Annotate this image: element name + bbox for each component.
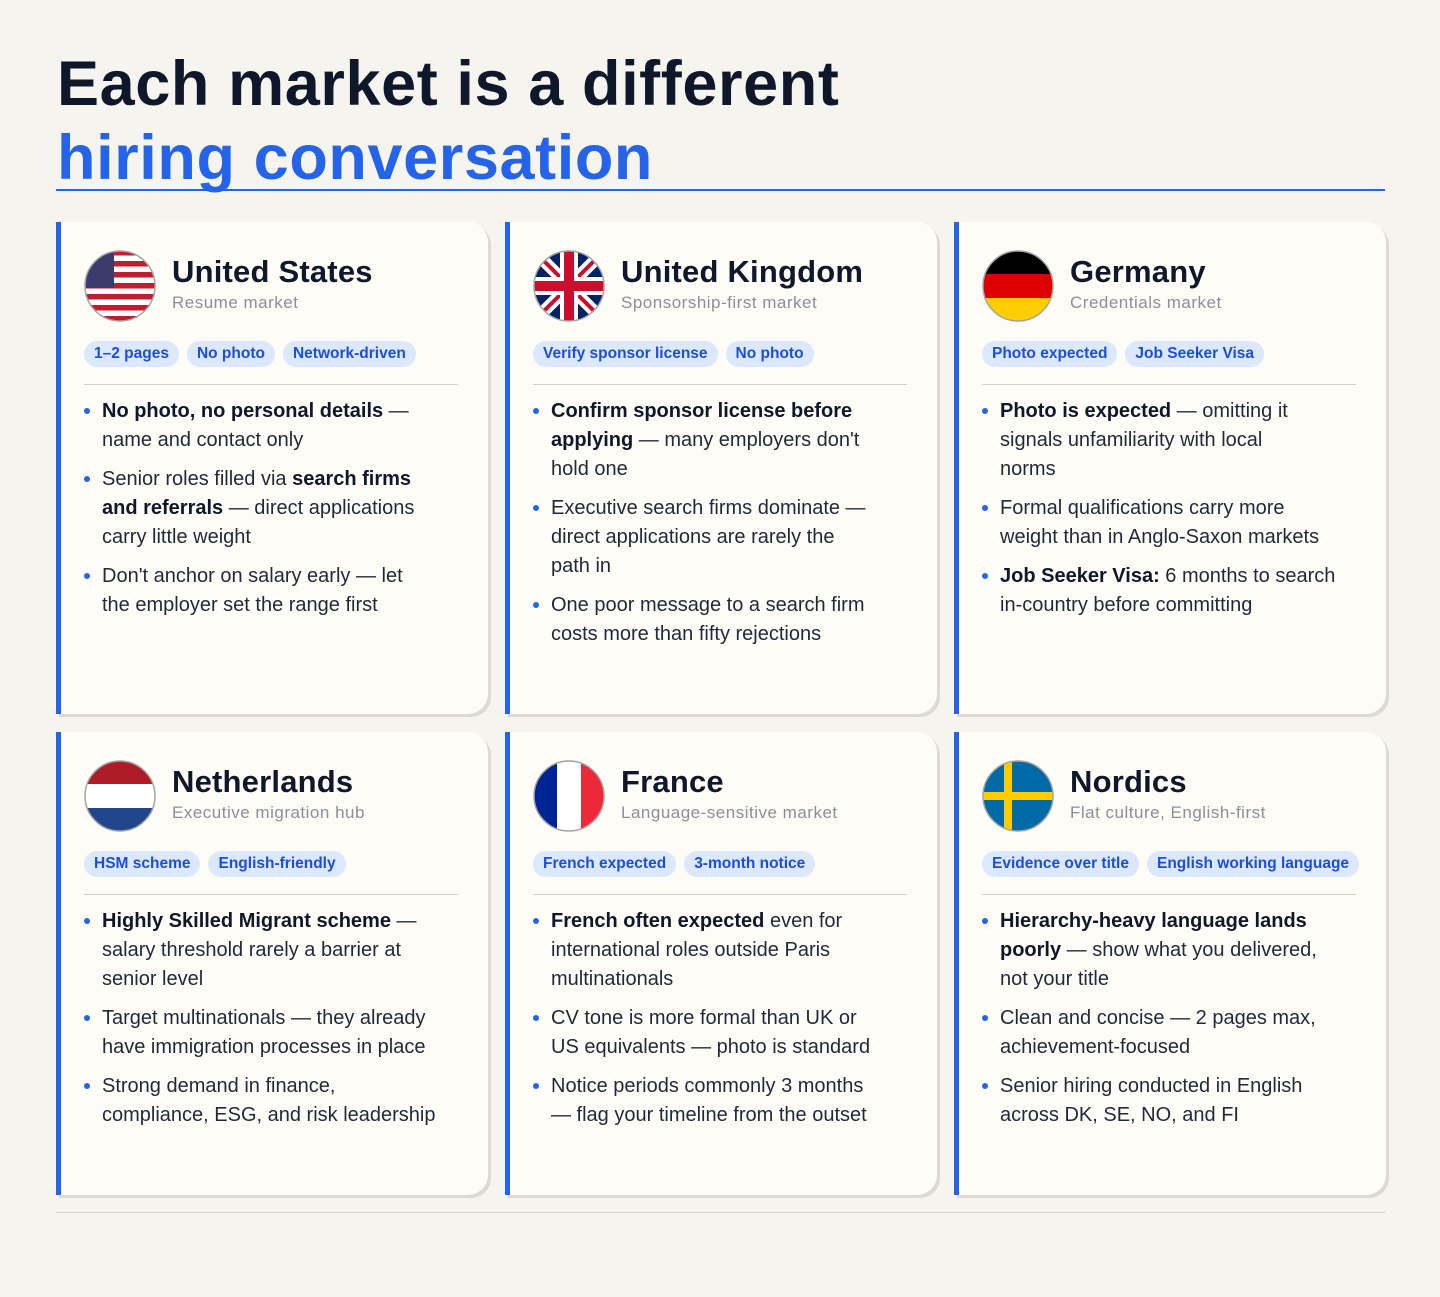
bullets: name and contact only bbox=[102, 429, 303, 451]
tags: Photo expected bbox=[992, 345, 1107, 362]
bullets: Job Seeker Visa: 6 months to search bbox=[1000, 565, 1335, 587]
tags: English-friendly bbox=[218, 855, 336, 872]
bullets: the employer set the range first bbox=[102, 594, 378, 616]
bullets: Senior roles filled via search firms bbox=[102, 468, 411, 490]
tags: 1–2 pages bbox=[94, 345, 169, 362]
panel: France: Language-sensitive market bbox=[621, 803, 838, 822]
bullets: Target multinationals — they already bbox=[102, 1007, 426, 1029]
panel: United Kingdom: Sponsorship-first market bbox=[621, 293, 817, 312]
bullets: — flag your timeline from the outset bbox=[551, 1104, 867, 1126]
bullets: salary threshold rarely a barrier at bbox=[102, 939, 401, 961]
bullets: CV tone is more formal than UK or bbox=[551, 1007, 857, 1029]
icon: Germany flag bbox=[982, 250, 1054, 322]
bullets: in-country before committing bbox=[1000, 594, 1252, 616]
heading: United States bbox=[172, 254, 373, 289]
icon: UK flag bbox=[533, 250, 605, 322]
tags bbox=[982, 851, 1359, 877]
tags bbox=[84, 341, 416, 367]
panel: Germany: Credentials market bbox=[1070, 293, 1222, 312]
bullets: poorly — show what you delivered, bbox=[1000, 939, 1317, 961]
panel: Nordics: Flat culture, English-first bbox=[1070, 803, 1266, 822]
bullets: costs more than fifty rejections bbox=[551, 623, 821, 645]
bullets: applying — many employers don't bbox=[551, 429, 859, 451]
bullets: Clean and concise — 2 pages max, bbox=[1000, 1007, 1316, 1029]
bullets: and referrals — direct applications bbox=[102, 497, 414, 519]
panel: France bbox=[505, 732, 937, 1195]
bullets: carry little weight bbox=[102, 526, 251, 548]
panel: United States: Resume market bbox=[172, 293, 298, 312]
tags: Network-driven bbox=[293, 345, 406, 362]
title bbox=[57, 49, 839, 193]
tags bbox=[982, 341, 1264, 367]
bullets: French often expected even for bbox=[551, 910, 842, 932]
heading: Nordics bbox=[1070, 764, 1187, 799]
tags: English working language bbox=[1157, 855, 1349, 872]
bullets: Executive search firms dominate — bbox=[551, 497, 866, 519]
heading: United Kingdom bbox=[621, 254, 863, 289]
bullets: multinationals bbox=[551, 968, 673, 990]
bullets: Hierarchy-heavy language lands bbox=[1000, 910, 1307, 932]
bullets bbox=[84, 910, 436, 1126]
bullets bbox=[982, 910, 1317, 1126]
bullets: One poor message to a search firm bbox=[551, 594, 864, 616]
bullets: signals unfamiliarity with local bbox=[1000, 429, 1262, 451]
heading: Netherlands bbox=[172, 764, 353, 799]
panel: United States bbox=[56, 222, 488, 714]
tags: 3-month notice bbox=[694, 855, 805, 872]
panel: Netherlands bbox=[56, 732, 488, 1195]
bullets: Confirm sponsor license before bbox=[551, 400, 852, 422]
icon: US flag bbox=[84, 250, 156, 322]
bullets: international roles outside Paris bbox=[551, 939, 830, 961]
bullets: Don't anchor on salary early — let bbox=[102, 565, 403, 587]
bullets: Formal qualifications carry more bbox=[1000, 497, 1285, 519]
tags bbox=[533, 341, 814, 367]
bullets: Senior hiring conducted in English bbox=[1000, 1075, 1302, 1097]
bullets: Strong demand in finance, bbox=[102, 1075, 336, 1097]
title: Each market is a different bbox=[57, 49, 839, 119]
tags: Evidence over title bbox=[992, 855, 1129, 872]
bullets: norms bbox=[1000, 458, 1056, 480]
bullets: not your title bbox=[1000, 968, 1109, 990]
icon: Netherlands flag bbox=[84, 760, 156, 832]
panel: Netherlands: Executive migration hub bbox=[172, 803, 365, 822]
bullets bbox=[84, 400, 414, 616]
icon: Nordic flag bbox=[982, 760, 1054, 832]
bullets bbox=[533, 910, 870, 1126]
bullets: compliance, ESG, and risk leadership bbox=[102, 1104, 436, 1126]
title: hiring conversation bbox=[57, 123, 653, 193]
panel: Nordics bbox=[954, 732, 1386, 1195]
tags bbox=[84, 851, 346, 877]
bullets bbox=[982, 400, 1335, 616]
bullets: Highly Skilled Migrant scheme — bbox=[102, 910, 417, 932]
bullets: have immigration processes in place bbox=[102, 1036, 426, 1058]
tags: No photo bbox=[197, 345, 265, 362]
bullets: Notice periods commonly 3 months bbox=[551, 1075, 863, 1097]
tags: French expected bbox=[543, 855, 666, 872]
bullets: across DK, SE, NO, and FI bbox=[1000, 1104, 1239, 1126]
bullets: weight than in Anglo-Saxon markets bbox=[1000, 526, 1319, 548]
bullets: hold one bbox=[551, 458, 628, 480]
icon: France flag bbox=[533, 760, 605, 832]
bullets: No photo, no personal details — bbox=[102, 400, 409, 422]
bullets: direct applications are rarely the bbox=[551, 526, 834, 548]
bullets: US equivalents — photo is standard bbox=[551, 1036, 870, 1058]
bullets: achievement-focused bbox=[1000, 1036, 1190, 1058]
bullets: senior level bbox=[102, 968, 203, 990]
heading: Germany bbox=[1070, 254, 1206, 289]
tags: Job Seeker Visa bbox=[1135, 345, 1254, 362]
tags: Verify sponsor license bbox=[543, 345, 708, 362]
panel: United Kingdom bbox=[505, 222, 937, 714]
bullets: path in bbox=[551, 555, 611, 577]
heading: France bbox=[621, 764, 724, 799]
bullets bbox=[533, 400, 866, 645]
tags: HSM scheme bbox=[94, 855, 190, 872]
tags: No photo bbox=[736, 345, 804, 362]
bullets: Photo is expected — omitting it bbox=[1000, 400, 1288, 422]
panel: Germany bbox=[954, 222, 1386, 714]
tags bbox=[533, 851, 815, 877]
